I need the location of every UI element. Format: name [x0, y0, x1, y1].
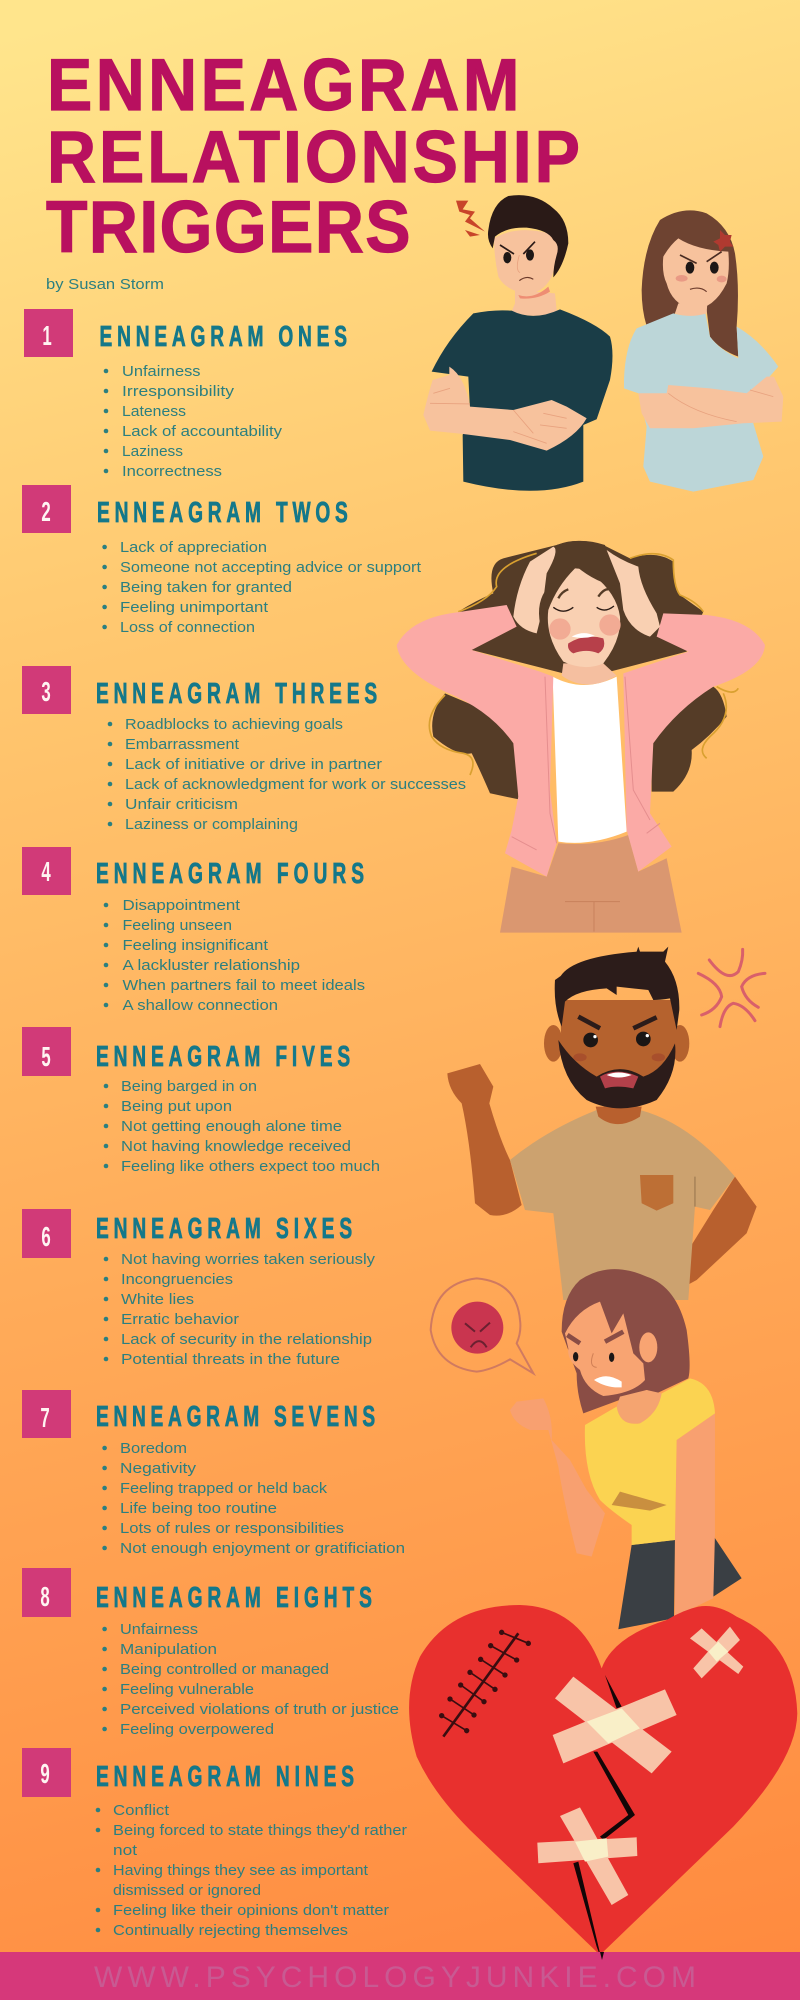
section: Enneagram Eights: Unfairness — [120, 1621, 198, 1638]
section: Enneagram Sixes: Potential threats in the future — [121, 1351, 340, 1368]
section: Enneagram Threes: Laziness or complaining — [125, 816, 298, 833]
section: Enneagram Fours: When partners fail to meet ideals — [122, 977, 365, 994]
section: Enneagram Eights: Feeling vulnerable — [120, 1681, 254, 1698]
illustration: broken heart with stitches and bandages — [409, 1605, 797, 1960]
section: Enneagram Sevens: Lots of rules or responsibilities — [120, 1520, 344, 1537]
illustration: angry woman in yellow shirt pointing — [510, 1269, 742, 1629]
byline: by Susan Storm — [46, 276, 164, 293]
section: Enneagram Ones: Unfairness — [122, 363, 200, 380]
section: Enneagram Fives — [22, 1027, 380, 1175]
section: Enneagram Threes: Lack of acknowledgment for work or successes — [125, 776, 466, 793]
section: Enneagram Sevens: Feeling trapped or held back — [120, 1480, 328, 1497]
section: Enneagram Sixes: Lack of security in the relationship — [121, 1331, 372, 1348]
section: Enneagram Threes: ENNEAGRAM THREES — [96, 678, 377, 710]
section: Enneagram Twos: Someone not accepting advice or support — [120, 559, 422, 576]
section: Enneagram Nines: Conflict — [113, 1802, 170, 1819]
section: Enneagram Nines: 9 — [40, 1758, 50, 1789]
footer bar with website — [0, 1952, 800, 2000]
section: Enneagram Sixes: White lies — [121, 1291, 194, 1308]
section: Enneagram Ones: 1 — [42, 320, 52, 351]
section: Enneagram Nines: Continually rejecting themselves — [113, 1922, 348, 1939]
section: Enneagram Eights: ENNEAGRAM EIGHTS — [96, 1582, 372, 1614]
section: Enneagram Fours: Feeling insignificant — [122, 937, 269, 954]
section: Enneagram Fours: A shallow connection — [122, 997, 278, 1014]
section: Enneagram Nines: ENNEAGRAM NINES — [96, 1761, 354, 1793]
section: Enneagram Fours: Disappointment — [122, 897, 241, 914]
section: Enneagram Eights: Being controlled or managed — [120, 1661, 329, 1678]
section: Enneagram Twos — [22, 485, 422, 636]
section: Enneagram Threes — [22, 666, 466, 833]
section: Enneagram Threes: 3 — [41, 676, 51, 707]
section: Enneagram Fives: Not having knowledge received — [121, 1138, 351, 1155]
section: Enneagram Sevens: Not enough enjoyment or gratificiation — [120, 1540, 405, 1557]
section: Enneagram Fives: ENNEAGRAM FIVES — [96, 1041, 350, 1073]
section: Enneagram Fours: A lackluster relationship — [122, 957, 300, 974]
illustration: angry man with arms crossed — [423, 195, 612, 491]
section: Enneagram Sixes: Incongruencies — [121, 1271, 233, 1288]
section: Enneagram Twos: Feeling unimportant — [120, 599, 269, 616]
section: Enneagram Twos: ENNEAGRAM TWOS — [97, 497, 348, 529]
section: Enneagram Nines: Being forced to state things they'd rather — [113, 1822, 407, 1839]
section: Enneagram Fives: Being barged in on — [121, 1078, 257, 1095]
illustration: shouting man with a raised fist — [447, 947, 757, 1300]
section: Enneagram Fours: 4 — [41, 856, 51, 887]
section: Enneagram Fives: 5 — [41, 1041, 51, 1072]
section: Enneagram Ones: Laziness — [122, 443, 183, 460]
section: Enneagram Twos: Lack of appreciation — [120, 539, 267, 556]
section: Enneagram Sevens: ENNEAGRAM SEVENS — [96, 1401, 375, 1433]
section: Enneagram Nines: dismissed or ignored — [113, 1882, 261, 1899]
icon: speech bubble with angry emoji — [431, 1278, 533, 1373]
section: Enneagram Ones: Incorrectness — [122, 463, 222, 480]
section: Enneagram Threes: Lack of initiative or drive in partner — [125, 756, 382, 773]
section: Enneagram Fours: ENNEAGRAM FOURS — [96, 858, 364, 890]
section: Enneagram Eights: 8 — [40, 1581, 50, 1612]
section: Enneagram Sixes: Erratic behavior — [121, 1311, 239, 1328]
section: Enneagram Eights — [22, 1568, 399, 1738]
section: Enneagram Sevens: Boredom — [120, 1440, 187, 1457]
section: Enneagram Sixes: ENNEAGRAM SIXES — [96, 1213, 352, 1245]
section: Enneagram Ones: Irresponsibility — [122, 383, 235, 400]
section: Enneagram Ones: Lack of accountability — [122, 423, 283, 440]
section: Enneagram Nines: Feeling like their opinions don't matter — [113, 1902, 389, 1919]
section: Enneagram Eights: Manipulation — [120, 1641, 217, 1658]
section: Enneagram Threes: Embarrassment — [125, 736, 240, 753]
icon: anger symbol — [698, 949, 765, 1027]
title: ENNEAGRAM — [47, 44, 519, 126]
section: Enneagram Ones — [24, 309, 347, 480]
section: Enneagram Fives: Feeling like others expect too much — [121, 1158, 380, 1175]
section: Enneagram Twos: Being taken for granted — [120, 579, 292, 596]
section: Enneagram Sevens: Negativity — [120, 1460, 197, 1477]
section: Enneagram Eights: Feeling overpowered — [120, 1721, 274, 1738]
section: Enneagram Twos: Loss of connection — [120, 619, 255, 636]
section: Enneagram Fours: Feeling unseen — [122, 917, 232, 934]
section: Enneagram Ones: Lateness — [122, 403, 186, 420]
section: Enneagram Ones: ENNEAGRAM ONES — [100, 321, 347, 353]
section: Enneagram Sevens: 7 — [40, 1402, 50, 1433]
section: Enneagram Twos: 2 — [41, 496, 51, 527]
section: Enneagram Sixes: Not having worries taken seriously — [121, 1251, 376, 1268]
section: Enneagram Threes: Roadblocks to achieving goals — [125, 716, 343, 733]
section: Enneagram Threes: Unfair criticism — [125, 796, 238, 813]
section: Enneagram Nines: Having things they see as important — [113, 1862, 369, 1879]
section: Enneagram Sevens — [22, 1390, 405, 1557]
title: TRIGGERS — [46, 186, 411, 268]
section: Enneagram Eights: Perceived violations of truth or justice — [120, 1701, 399, 1718]
section: Enneagram Sevens: Life being too routine — [120, 1500, 277, 1517]
section: Enneagram Sixes — [22, 1209, 376, 1368]
title — [46, 44, 580, 268]
section: Enneagram Fives: Being put upon — [121, 1098, 232, 1115]
section: Enneagram Fives: Not getting enough alone time — [121, 1118, 342, 1135]
illustration: angry woman with arms crossed — [624, 210, 783, 492]
section: Enneagram Sixes: 6 — [41, 1221, 51, 1252]
title: RELATIONSHIP — [47, 116, 580, 198]
section: Enneagram Fours — [22, 847, 365, 1014]
footer bar with website: WWW.PSYCHOLOGYJUNKIE.COM — [94, 1961, 696, 1994]
section: Enneagram Nines: not — [113, 1842, 138, 1859]
illustration: distressed woman holding her head — [397, 541, 765, 933]
section: Enneagram Nines — [22, 1748, 407, 1939]
